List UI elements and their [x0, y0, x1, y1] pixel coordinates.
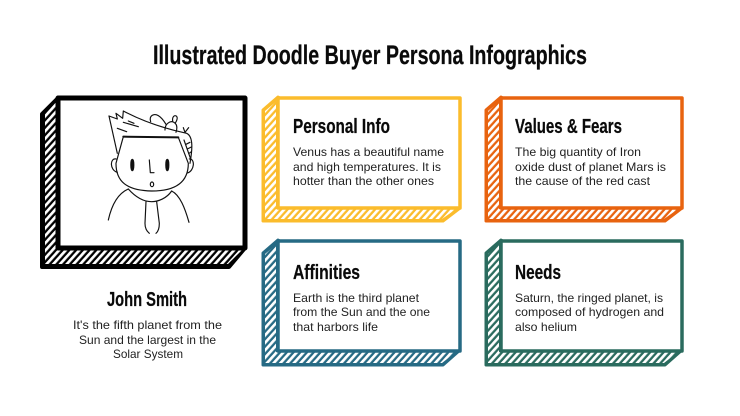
heading: Affinities — [293, 262, 360, 284]
body text: composed of hydrogen and — [515, 305, 664, 319]
body text: Saturn, the ringed planet, is — [515, 291, 663, 305]
portrait card hatched side — [42, 98, 245, 267]
persona description: It's the fifth planet from the — [73, 318, 222, 332]
body text: Earth is the third planet — [293, 291, 420, 305]
hatched side — [263, 97, 460, 221]
card front — [278, 241, 460, 351]
body text: hotter than the other ones — [293, 174, 434, 188]
hatched side — [486, 240, 682, 365]
body text: The big quantity of Iron — [515, 145, 641, 159]
card front — [278, 98, 460, 208]
heading: Personal Info — [293, 116, 390, 138]
panel: needs — [486, 240, 682, 365]
body text — [515, 145, 666, 188]
body text — [293, 145, 444, 188]
heading: Needs — [515, 262, 561, 284]
body text: from the Sun and the one — [293, 305, 430, 319]
portrait card front — [58, 98, 245, 248]
heading: Values & Fears — [515, 116, 622, 138]
card front — [501, 98, 682, 208]
card front — [501, 241, 682, 351]
persona description: Sun and the largest in the — [79, 333, 216, 347]
persona description: Solar System — [113, 347, 183, 361]
title: Illustrated Doodle Buyer Persona Infographics — [153, 40, 587, 70]
panel: values and fears — [486, 97, 682, 221]
panel: affinities — [263, 240, 460, 365]
hatched side — [486, 97, 682, 221]
panel: persona portrait — [42, 98, 245, 267]
body text: Venus has a beautiful name — [293, 145, 444, 159]
body text: and high temperatures. It is — [293, 160, 441, 174]
persona name: John Smith — [107, 289, 187, 311]
body text — [515, 291, 664, 334]
body text — [293, 291, 430, 334]
body text: oxide dust of planet Mars is — [515, 160, 666, 174]
body text: the cause of the red cast — [515, 174, 651, 188]
body text: that harbors life — [293, 320, 378, 334]
body text: also helium — [515, 320, 577, 334]
hatched side — [263, 240, 460, 365]
persona description — [73, 318, 222, 361]
panel: personal info — [263, 97, 460, 221]
icon: doodle man — [108, 111, 193, 233]
